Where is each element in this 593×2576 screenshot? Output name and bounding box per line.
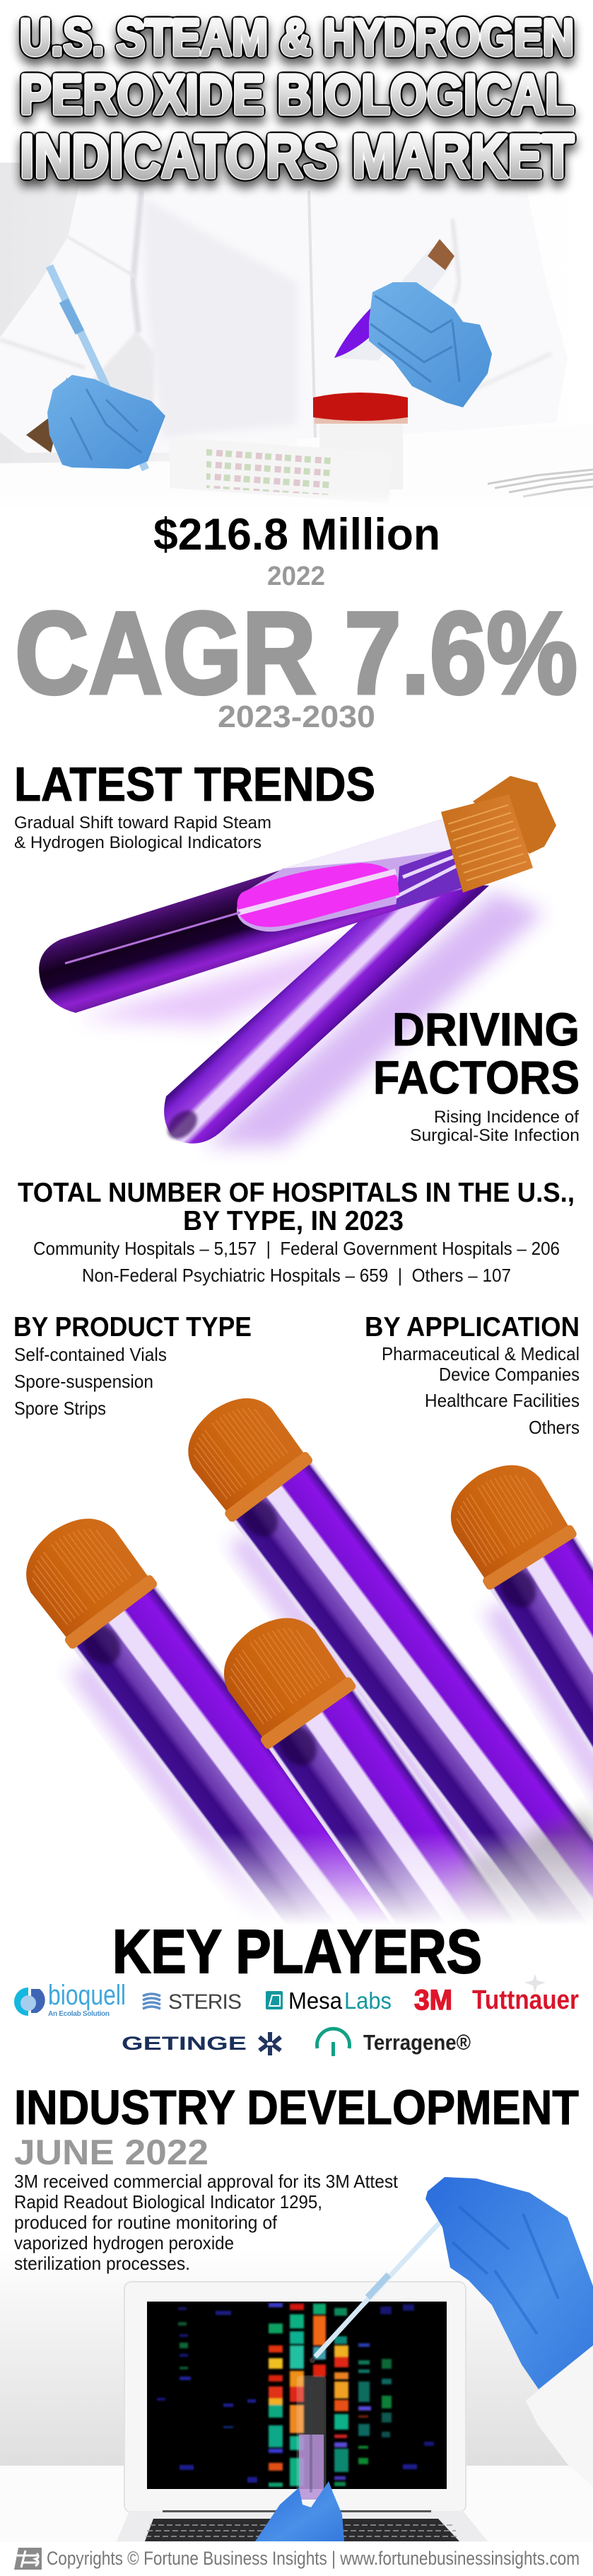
desk surface bbox=[0, 2466, 593, 2542]
laptop keyboard bbox=[488, 470, 593, 497]
glass section bbox=[237, 819, 462, 932]
driving factors text: Surgical-Site Infection bbox=[410, 1126, 580, 1145]
hero photo: lab technician holding a test tube bbox=[0, 163, 593, 510]
development text: 3M received commercial approval for its 3M Attest bbox=[14, 2171, 399, 2192]
skin wrist bbox=[26, 377, 67, 453]
application list: Healthcare Facilities bbox=[425, 1390, 580, 1411]
illustration: two purple test tubes bbox=[39, 776, 556, 1146]
date: JUNE 2022 bbox=[14, 2133, 209, 2172]
application list bbox=[382, 1343, 580, 1438]
gel bands bbox=[157, 2303, 434, 2487]
logo: bioquell bbox=[14, 1980, 126, 2018]
front cap bbox=[441, 794, 533, 893]
laptop base bbox=[117, 2511, 488, 2541]
application list: Others bbox=[529, 1417, 580, 1438]
hospital counts: Non-Federal Psychiatric Hospitals – 659 | Others – 107 bbox=[82, 1265, 511, 1286]
illustration: four purple test tubes bbox=[26, 1398, 593, 2303]
development text: Rapid Readout Biological Indicator 1295, bbox=[14, 2191, 322, 2212]
product type list: Self-contained Vials bbox=[14, 1344, 167, 1365]
logo: 3M: 3M bbox=[414, 1985, 452, 2016]
specimen cup with red lid bbox=[319, 419, 403, 489]
development text: produced for routine monitoring of bbox=[14, 2212, 278, 2233]
heading: driving factors bbox=[373, 1003, 580, 1103]
magenta liquid surface bbox=[237, 863, 399, 927]
coat folds and shadows bbox=[143, 198, 297, 439]
icon: Fortune Business Insights logo bbox=[14, 2548, 42, 2570]
development text bbox=[14, 2171, 399, 2274]
heading: by application: BY APPLICATION bbox=[365, 1312, 580, 1342]
tube front bbox=[39, 819, 462, 1013]
glove right bbox=[369, 282, 492, 407]
logo: Terragene: Terragene® bbox=[363, 2030, 471, 2055]
logo: STERIS: STERIS bbox=[168, 1990, 242, 2014]
back cap bbox=[473, 776, 556, 854]
heading: by product type: BY PRODUCT TYPE bbox=[13, 1312, 252, 1342]
upper glove bbox=[425, 2177, 593, 2389]
logo: bioquell: bioquell bbox=[48, 1980, 126, 2011]
lower glove bbox=[255, 2481, 344, 2541]
latest trends text bbox=[14, 813, 271, 852]
product type list: Spore-suspension bbox=[14, 1371, 153, 1392]
footer bbox=[14, 2548, 580, 2570]
market value year: 2022 bbox=[267, 562, 325, 591]
heading: total number of hospitals bbox=[18, 1178, 575, 1236]
heading: key players: KEY PLAYERS bbox=[112, 1918, 482, 1986]
lab coat silhouette bbox=[0, 185, 568, 453]
desk bbox=[0, 424, 593, 506]
laptop lid bbox=[124, 2282, 466, 2512]
logo: Getinge: GETINGE bbox=[122, 2033, 247, 2054]
heading: latest trends: LATEST TRENDS bbox=[14, 758, 375, 811]
application list: Pharmaceutical & Medical bbox=[382, 1343, 580, 1364]
driving factors text bbox=[410, 1108, 580, 1145]
tube back bbox=[164, 884, 489, 1144]
logo: Terragene bbox=[317, 2029, 471, 2056]
development text: sterilization processes. bbox=[14, 2253, 190, 2274]
photo: laptop with gel electrophoresis and pipette bbox=[0, 2177, 593, 2542]
heading: driving factors: DRIVING bbox=[392, 1003, 580, 1055]
latest trends text: Gradual Shift toward Rapid Steam bbox=[14, 813, 271, 832]
development text: vaporized hydrogen peroxide bbox=[14, 2232, 234, 2253]
logo: MesaLabs: Mesa bbox=[288, 1988, 343, 2014]
product type list: Spore Strips bbox=[14, 1398, 106, 1419]
gap between arm and torso bbox=[90, 331, 155, 442]
hospital counts bbox=[33, 1238, 560, 1286]
logo: Tuttnauer: Tuttnauer bbox=[472, 1985, 579, 2015]
application list: Device Companies bbox=[439, 1364, 580, 1385]
glove left bbox=[47, 375, 165, 469]
pen bbox=[49, 266, 146, 470]
market value: $216.8 Million bbox=[153, 510, 440, 559]
test tube bbox=[334, 248, 452, 361]
latest trends text: & Hydrogen Biological Indicators bbox=[14, 833, 262, 852]
logo: bioquell: An Ecolab Solution bbox=[48, 2010, 110, 2018]
heading: driving factors: FACTORS bbox=[373, 1051, 580, 1103]
hospital counts: Community Hospitals – 5,157 | Federal Government Hospitals – 206 bbox=[33, 1238, 560, 1259]
pipette bbox=[315, 2211, 450, 2357]
lab coat cuff bbox=[526, 2345, 593, 2486]
driving factors text: Rising Incidence of bbox=[434, 1108, 579, 1127]
laptop screen bbox=[147, 2302, 447, 2489]
heading: total number of hospitals: BY TYPE, IN 2023 bbox=[183, 1206, 404, 1236]
CAGR period: 2023-2030 bbox=[218, 700, 375, 734]
product type list bbox=[14, 1344, 167, 1419]
logo: MesaLabs: Labs bbox=[344, 1988, 392, 2014]
test tube bbox=[298, 2377, 325, 2498]
logo: Getinge bbox=[122, 2032, 281, 2055]
room background bbox=[0, 2249, 593, 2466]
reagent strip bottle bbox=[170, 437, 392, 504]
logo: MesaLabs bbox=[266, 1988, 392, 2014]
logo: Tuttnauer bbox=[472, 1974, 579, 2015]
title bbox=[20, 9, 574, 191]
